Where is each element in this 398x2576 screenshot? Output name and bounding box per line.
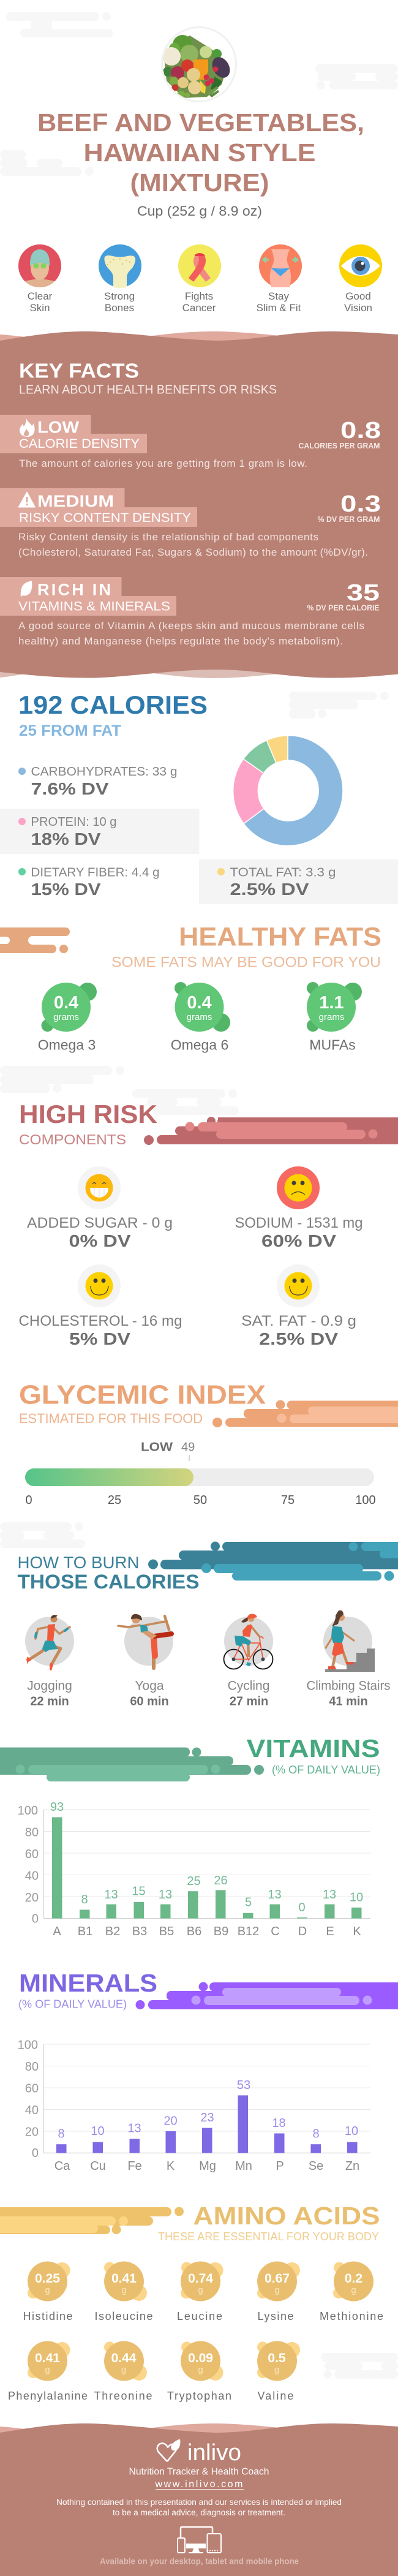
risk: sodium: 60% DV [261,1231,336,1250]
panel: calories [0,690,398,904]
legend: protein: PROTEIN: 10 g [31,815,116,829]
amino: histidine: g [45,2285,50,2295]
bar chart: minerals: 10 [345,2125,358,2138]
bar chart: vitamins: 8 [81,1893,88,1906]
activity: climbing stairs [323,1611,375,1672]
subheading: SOME FATS MAY BE GOOD FOR YOU [111,954,381,970]
bar chart: vitamins: 13 [268,1888,282,1902]
fact: rich in vitamins and minerals: healthy) and Manganese (helps regulate the body's metabolism). [18,635,343,647]
icon labels: Slim & Fit [257,302,301,314]
amino: methionine: Methionine [320,2310,383,2322]
fat: omega 3 [38,983,97,1052]
icon labels: Strong [104,290,135,302]
amino: isoleucine: 0.41 [111,2272,137,2286]
icon: clear skin [18,244,61,287]
activity: jogging [25,1615,74,1671]
amino: threonine [94,2341,152,2402]
fact: risky content density: RISKY CONTENT DENSITY [19,511,191,525]
decorative banner: high risk [144,1117,398,1145]
bar chart: vitamins: 10 [350,1890,363,1904]
legend: protein [18,815,116,848]
amino: phenylalanine: 0.41 [35,2351,60,2365]
bar chart: vitamins: A [53,1925,61,1938]
bar chart: vitamins: B2 [105,1925,120,1938]
activity durations: 41 min [329,1694,368,1708]
icon: devices [178,2527,221,2553]
panel: minerals [18,1969,398,2173]
decorative banner: vitamins [0,1747,264,1781]
fact: rich in vitamins and minerals: VITAMINS & MINERALS [18,599,170,614]
fat: omega 6: grams [187,1012,212,1022]
bar chart: vitamins: D [298,1925,307,1938]
activity durations: 60 min [130,1694,169,1708]
decorative banner: minerals [136,1982,398,2009]
disclaimer: Nothing contained in this presentation and our services is intended or implied [56,2498,342,2507]
bar chart: minerals: 0 [32,2147,39,2160]
subheading: COMPONENTS [19,1131,126,1147]
activity labels [27,1679,391,1693]
bar chart: vitamins: 26 [214,1874,228,1887]
icon: slim and fit [259,244,302,287]
fat: mufas: 1.1 [319,993,344,1013]
bar chart: vitamins: 40 [25,1870,39,1883]
marker: low 49: 49 [181,1441,195,1454]
panel: glycemic index [19,1380,398,1507]
tagline: Nutrition Tracker & Health Coach [129,2466,269,2477]
bar chart: vitamins: B1 [78,1925,92,1938]
title [37,108,364,197]
bar chart: vitamins: E [326,1925,334,1938]
subheading: (% OF DAILY VALUE) [18,1998,127,2011]
availability note: Available on your desktop, tablet and mobile phone [100,2556,299,2566]
bar chart: minerals: 100 [18,2039,38,2052]
icon: good vision [339,244,382,287]
risk: saturated fat: SAT. FAT - 0.9 g [241,1313,356,1329]
fat: omega 6: 0.4 [187,993,212,1013]
decorative banner: glycemic [212,1400,398,1427]
decorative banner: amino acids [0,2207,184,2234]
risk: cholesterol: 5% DV [69,1329,130,1348]
panel: vitamins [0,1734,380,1938]
amino: phenylalanine: Phenylalanine [8,2390,88,2402]
bar chart: vitamins: 80 [25,1826,39,1839]
risk: added sugar [27,1166,173,1250]
bar chart: minerals [18,2039,370,2173]
bar chart: minerals: 80 [25,2060,39,2074]
heading: high risk: HIGH RISK [19,1100,157,1128]
icon labels: Cancer [182,302,216,314]
icon labels [28,290,372,314]
bar chart: vitamins: 13 [323,1888,336,1902]
title: (MIXTURE) [130,168,269,197]
heading: healthy fats: HEALTHY FATS [179,923,381,952]
fact: calorie density [0,415,381,469]
heading: key facts: KEY FACTS [19,359,139,382]
fact: risky content density: 0.3 [340,491,381,517]
amino: valine: Valine [257,2390,294,2402]
fat: mufas [307,982,362,1052]
amino: leucine [177,2262,223,2322]
gauge axis: 75 [281,1494,295,1507]
bar chart: minerals: P [276,2159,284,2173]
bar chart: vitamins: 0 [32,1913,39,1926]
risk: cholesterol [18,1264,182,1348]
fact: rich in vitamins and minerals: % DV PER CALORIE [307,603,380,613]
bar chart: minerals: 60 [25,2082,39,2095]
bar chart: vitamins: 5 [245,1895,252,1909]
heading: those calories: THOSE CALORIES [17,1571,200,1593]
activity durations: 27 min [230,1694,268,1708]
website: www.inlivo.com [154,2479,242,2490]
legend: dietary fiber: DIETARY FIBER: 4.4 g [31,866,159,880]
bar chart: minerals: Mg [199,2159,216,2173]
fat: omega 3: Omega 3 [38,1037,96,1052]
risk: sodium: SODIUM - 1531 mg [235,1215,362,1231]
gauge axis: 25 [108,1494,121,1507]
title: HAWAIIAN STYLE [83,138,316,167]
brand name: inlivo [187,2440,241,2466]
bar chart: minerals: 8 [58,2127,65,2140]
amino: histidine [23,2262,72,2322]
gauge axis: 100 [355,1494,376,1507]
subheading: LEARN ABOUT HEALTH BENEFITS OR RISKS [19,383,277,397]
amino: leucine: 0.74 [188,2272,213,2286]
risk: cholesterol: CHOLESTEROL - 16 mg [18,1313,182,1329]
amino: methionine: 0.2 [345,2272,362,2286]
decorative banner: healthy fats [0,927,71,953]
risk: sodium [235,1166,362,1250]
serving size: Cup (252 g / 8.9 oz) [137,203,262,219]
subheading: from fat: 25 FROM FAT [19,722,121,739]
fact: risky content density: Risky Content density is the relationship of bad components [18,531,318,543]
amino: leucine: Leucine [177,2310,222,2322]
bar chart: minerals: 53 [237,2079,250,2092]
amino: valine [257,2341,300,2402]
amino: tryptophan: Tryptophan [167,2390,231,2402]
icon: fights cancer ribbon [178,244,221,287]
amino: isoleucine [94,2262,153,2322]
legend: protein: 18% DV [31,829,101,848]
donut chart [233,735,343,845]
subheading: THESE ARE ESSENTIAL FOR YOUR BODY [158,2230,379,2243]
amino: lysine: Lysine [257,2310,294,2322]
amino: lysine: 0.67 [265,2272,290,2286]
activity: yoga [118,1614,173,1668]
gauge axis: 50 [193,1494,207,1507]
bar chart: vitamins: 25 [187,1875,201,1888]
footer [0,2423,398,2576]
bar chart: vitamins: 13 [159,1888,172,1902]
icon labels: Bones [105,302,134,314]
gauge axis: 0 [25,1494,32,1507]
disclaimer: to be a medical advice, diagnosis or treatment. [113,2508,285,2517]
bar chart: minerals: 40 [25,2104,39,2117]
icon labels: Stay [268,290,290,302]
bar chart: minerals: Ca [54,2159,70,2173]
panel: healthy fats [0,923,381,1052]
fact: calorie density: 0.8 [340,418,381,444]
logo: heart with leaf [157,2440,179,2461]
heading: how to burn: HOW TO BURN [17,1553,140,1572]
risk: added sugar: 0% DV [69,1231,131,1250]
amino: valine: 0.5 [268,2351,286,2365]
amino: valine: g [274,2365,279,2375]
fact: risky content density [0,488,381,558]
bar chart: vitamins: B3 [132,1925,147,1938]
title: BEEF AND VEGETABLES, [37,108,364,137]
bar chart: minerals: 13 [127,2122,141,2136]
amino: tryptophan: g [198,2365,203,2375]
bar chart: minerals: 18 [272,2117,286,2130]
legend: total fat: TOTAL FAT: 3.3 g [230,866,336,880]
amino: tryptophan: 0.09 [188,2351,213,2365]
gauge bar [25,1468,374,1486]
panel: key facts [0,331,398,678]
bar chart: minerals: Fe [127,2159,142,2173]
heading: vitamins: VITAMINS [246,1734,380,1762]
bar chart: minerals: Cu [90,2159,106,2173]
activity durations: 22 min [30,1694,69,1708]
fact: rich in vitamins and minerals: A good source of Vitamin A (keeps skin and mucous membrane cells [18,620,364,632]
bar chart: vitamins: 100 [18,1804,38,1818]
fat: omega 3: 0.4 [54,993,78,1013]
decorative banner: burn [148,1541,398,1581]
bar chart: minerals: 20 [163,2115,178,2128]
legend: carbohydrates: 7.6% DV [31,779,109,798]
bar chart: vitamins: 60 [25,1848,39,1861]
legend row backgrounds [0,809,398,904]
activity labels: Yoga [135,1679,164,1693]
amino: threonine: Threonine [94,2390,152,2402]
legend: dietary fiber [18,866,159,899]
subheading: (% OF DAILY VALUE) [272,1764,380,1776]
legend: total fat [217,866,336,899]
risk: saturated fat [241,1264,356,1348]
icon labels: Skin [29,302,50,314]
fact: risky content density: (Cholesterol, Saturated Fat, Sugars & Sodium) to the amount (%DV/gr). [18,546,368,558]
bar chart: minerals: 20 [25,2126,39,2139]
amino: leucine: g [198,2285,203,2295]
legend: carbohydrates [18,765,178,798]
bar chart: vitamins: C [271,1925,280,1938]
heading: 192 calories: 192 CALORIES [18,690,208,719]
risk: saturated fat: 2.5% DV [259,1329,338,1348]
bar chart: minerals: Zn [345,2159,359,2173]
fact: risky content density: MEDIUM [37,492,114,510]
bar chart: vitamins: B9 [214,1925,228,1938]
bar chart: vitamins: 20 [25,1891,39,1905]
panel: amino acids [0,2202,383,2402]
bar chart: vitamins: K [353,1925,361,1938]
risk: added sugar: ADDED SUGAR - 0 g [27,1215,173,1231]
amino: tryptophan [167,2341,231,2402]
activity labels: Cycling [228,1679,269,1693]
fact: calorie density: CALORIE DENSITY [19,437,140,451]
icon labels: Fights [185,290,213,302]
fact: calorie density: The amount of calories you are getting from 1 gram is low. [19,458,307,469]
bar chart: vitamins: 13 [104,1888,118,1902]
bar chart: minerals: 10 [91,2125,105,2138]
bar chart: minerals: Se [309,2159,323,2173]
bar chart: minerals: 23 [200,2111,214,2125]
amino: phenylalanine [8,2341,88,2402]
amino: methionine: g [351,2285,356,2295]
fat: omega 6 [171,982,230,1052]
marker: low 49 [141,1441,195,1461]
food photo: vegetables [162,27,236,102]
bar chart: vitamins: B12 [238,1925,259,1938]
fact: calorie density: CALORIES PER GRAM [299,441,380,450]
icon labels: Clear [28,290,53,302]
bar chart: minerals: 8 [312,2127,320,2140]
heading: glycemic index: GLYCEMIC INDEX [19,1380,266,1410]
icon labels: Vision [344,302,372,314]
fact: rich in vitamins and minerals: RICH IN [37,581,111,599]
bar chart: vitamins: 93 [50,1800,64,1814]
disclaimer [56,2498,342,2517]
heading: minerals: MINERALS [19,1969,157,1997]
fat: mufas: MUFAs [309,1037,356,1052]
subheading: ESTIMATED FOR THIS FOOD [19,1411,203,1426]
bar chart: vitamins [18,1800,370,1938]
amino: isoleucine: g [121,2285,127,2295]
heading: amino acids: AMINO ACIDS [193,2202,380,2230]
amino: isoleucine: Isoleucine [94,2310,153,2322]
fact: calorie density: LOW [37,418,80,436]
amino: phenylalanine: g [45,2365,50,2375]
activity: cycling [224,1614,273,1669]
benefit icons row [18,244,382,314]
fat: omega 3: grams [53,1012,79,1022]
amino: threonine: 0.44 [111,2351,137,2365]
marker: low 49: LOW [141,1441,173,1454]
amino: threonine: g [121,2365,126,2375]
amino: lysine [257,2262,300,2322]
gauge axis [25,1494,376,1507]
fat: omega 6: Omega 6 [171,1037,228,1052]
bar chart: vitamins: B6 [187,1925,201,1938]
bar chart: vitamins: 15 [132,1884,146,1898]
icon labels: Good [345,290,371,302]
fat: mufas: grams [319,1012,344,1022]
activity labels: Climbing Stairs [306,1679,391,1693]
icon: strong bones [99,244,141,288]
bar chart: minerals: Mn [235,2159,252,2173]
activity labels: Jogging [27,1679,72,1693]
legend: carbohydrates: CARBOHYDRATES: 33 g [31,765,178,779]
amino: lysine: g [274,2285,280,2295]
activity durations [30,1694,368,1708]
fact: rich in vitamins and minerals [0,577,380,647]
legend: dietary fiber: 15% DV [31,880,101,899]
amino: methionine [320,2262,383,2322]
bar chart: vitamins: 0 [298,1901,306,1914]
fact: risky content density: % DV PER GRAM [317,515,380,524]
bar chart: vitamins: B5 [159,1925,174,1938]
panel: how to burn those calories [17,1541,398,1708]
amino: histidine: Histidine [23,2310,72,2322]
panel: high risk components [18,1100,398,1348]
bar chart: minerals: K [167,2159,175,2173]
fact: rich in vitamins and minerals: 35 [347,580,380,606]
amino: histidine: 0.25 [35,2272,60,2286]
legend: total fat: 2.5% DV [230,880,309,899]
